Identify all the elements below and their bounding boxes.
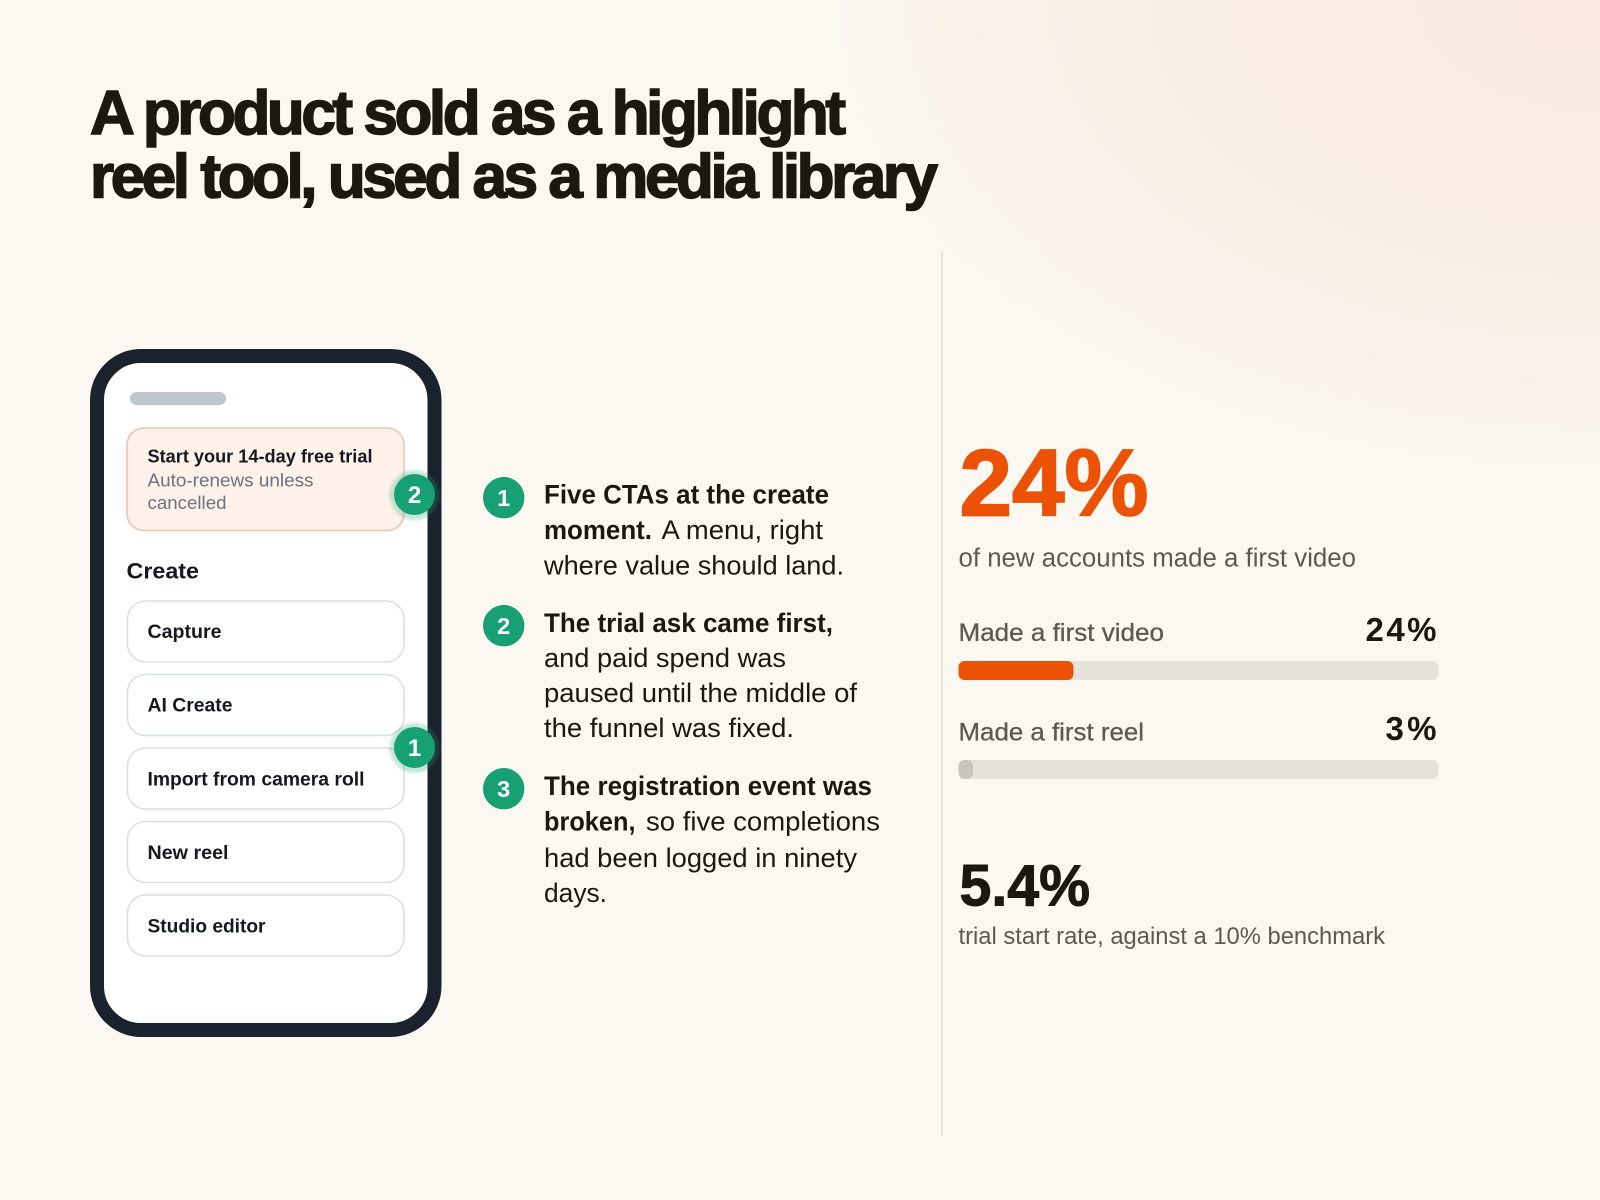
menu item: AI Create: AI Create — [148, 696, 232, 717]
finding 2: and paid spend was — [544, 643, 786, 673]
finding 3: had been logged in ninety — [544, 843, 858, 873]
bar: made a first reel — [958, 710, 1438, 779]
panel: phone mockup — [97, 356, 440, 1030]
title: reel tool, used as a media library — [90, 142, 939, 212]
finding 2: 2 — [497, 613, 510, 639]
trial banner: Start your 14-day free trial — [148, 446, 372, 466]
bar: made a first video: Made a first video — [958, 619, 1164, 647]
menu item: Capture: Capture — [148, 622, 222, 643]
finding 3: 3 — [497, 776, 510, 802]
marker 1 on phone: 1 — [408, 735, 421, 762]
big stat 24%: 24% — [960, 430, 1148, 536]
finding 1 — [483, 477, 844, 580]
finding 1: 1 — [497, 485, 510, 511]
finding 3: The registration event was — [544, 771, 872, 801]
marker 2 on phone: 2 — [408, 482, 421, 509]
menu item: Import from camera roll: Import from camera roll — [148, 769, 364, 790]
menu item: Capture — [128, 601, 404, 662]
marker 2 on phone — [390, 470, 440, 520]
phone frame — [97, 356, 434, 1030]
menu item: AI Create — [128, 674, 404, 736]
finding 2 — [483, 605, 857, 743]
menu item: New reel: New reel — [148, 843, 228, 864]
finding 1: where value should land. — [543, 550, 844, 580]
marker 1 on phone — [390, 723, 440, 773]
stat 5.4%: 5.4% — [960, 854, 1090, 918]
finding 2: paused until the middle of — [544, 678, 857, 708]
stat caption: trial start rate, against a 10% benchmark — [958, 923, 1386, 950]
trial banner — [127, 428, 404, 530]
trial banner: cancelled — [148, 493, 226, 513]
menu item: Studio editor: Studio editor — [148, 917, 266, 938]
panel: numbered findings — [483, 477, 880, 908]
phone status pill — [130, 392, 226, 405]
finding 3: days. — [544, 878, 607, 908]
finding 1: Five CTAs at the create — [544, 480, 829, 510]
title: A product sold as a highlight — [90, 79, 846, 148]
bar: made a first video — [958, 611, 1438, 680]
finding 1: moment. — [544, 515, 652, 545]
finding 3: so five completions — [646, 806, 880, 836]
trial banner: Auto-renews unless — [148, 470, 314, 490]
create heading: Create — [126, 558, 199, 584]
finding 2: the funnel was fixed. — [544, 713, 794, 743]
finding 2: The trial ask came first, — [544, 608, 833, 638]
bar: made a first reel: Made a first reel — [958, 718, 1144, 746]
bar: made a first video: 24% — [1366, 611, 1436, 648]
finding 1: A menu, right — [662, 515, 823, 545]
menu item: New reel — [128, 822, 404, 882]
finding 3 — [483, 768, 880, 908]
big stat caption: of new accounts made a first video — [958, 544, 1356, 572]
title — [90, 79, 939, 212]
bar: made a first reel: 3% — [1386, 710, 1436, 747]
panel: statistics — [958, 430, 1438, 950]
menu item: Import from camera roll — [128, 748, 404, 809]
finding 3: broken, — [544, 806, 636, 836]
menu item: Studio editor — [128, 895, 404, 956]
